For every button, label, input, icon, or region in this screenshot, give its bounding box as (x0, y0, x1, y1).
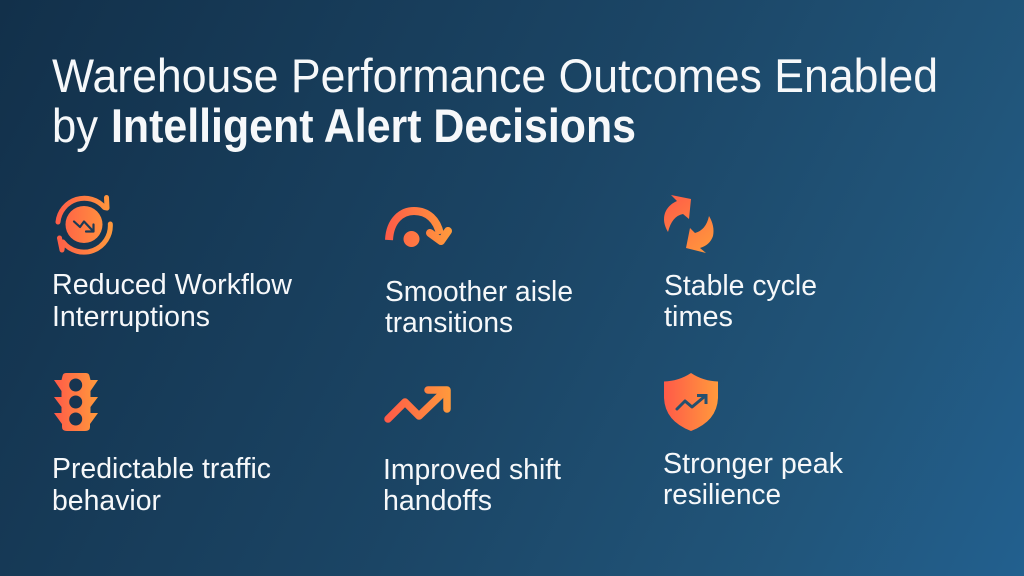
item: Stable cycle times (664, 195, 817, 333)
label: Predictable traffic (52, 453, 271, 485)
title (52, 50, 938, 153)
icon: rising trend arrow (388, 390, 447, 419)
item: Predictable traffic behavior (52, 373, 271, 517)
icon: circular arrows with downward trend (58, 198, 110, 252)
icon: two curved arrows (664, 195, 714, 253)
icon: traffic light (54, 373, 98, 431)
label: Reduced Workflow (52, 269, 292, 301)
label: Interruptions (52, 301, 210, 333)
label: behavior (52, 485, 162, 517)
label: resilience (663, 479, 781, 511)
item: Reduced Workflow Interruptions (52, 198, 292, 333)
label: times (664, 301, 733, 333)
title: Warehouse Performance Outcomes Enabled (52, 50, 938, 103)
title: by (52, 100, 98, 153)
label: transitions (385, 307, 513, 339)
item: Improved shift handoffs (383, 390, 561, 517)
label (663, 448, 844, 511)
label: handoffs (383, 485, 492, 517)
label: Stronger peak (663, 448, 844, 480)
label: Improved shift (383, 454, 561, 486)
title: Intelligent Alert Decisions (111, 100, 636, 153)
label (385, 276, 573, 339)
label: Stable cycle (664, 270, 817, 302)
label: Smoother aisle (385, 276, 573, 308)
label (664, 270, 817, 333)
icon: shield with trend line (664, 373, 718, 431)
item: Smoother aisle transitions (385, 211, 573, 339)
label (52, 453, 271, 517)
item: Stronger peak resilience (663, 373, 844, 511)
label (383, 454, 561, 517)
icon: curved arrow over dot (389, 211, 448, 247)
label (52, 269, 292, 333)
